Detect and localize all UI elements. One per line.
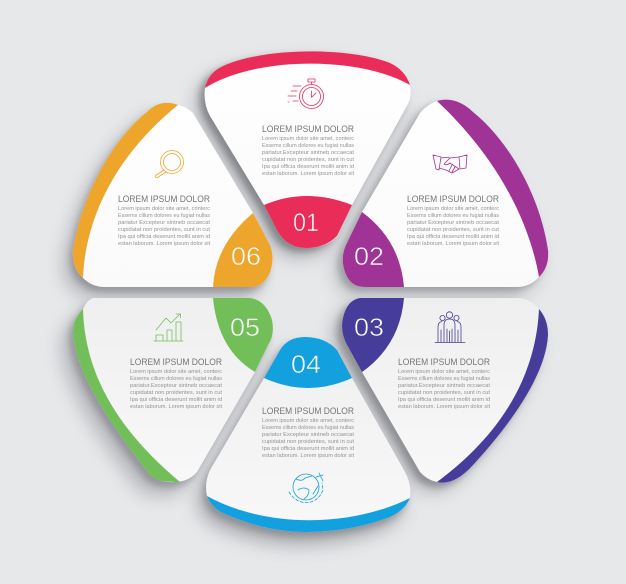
- heading 3: LOREM IPSUM DOLOR: [398, 357, 490, 367]
- panel 3: indigo: [342, 298, 548, 483]
- body text 2: pariatur Excepteur sintneb occaecat: [407, 220, 499, 226]
- body text 4: estan laborum. Lorem ipsum dolor sit: [262, 453, 354, 459]
- number 03: 03: [354, 314, 384, 342]
- panel 2: purple: [343, 100, 548, 287]
- number 02: 02: [354, 243, 384, 271]
- number tab 01: [264, 196, 352, 248]
- body text 2: estan laborum. Lorem ipsum dolor sit: [407, 241, 499, 247]
- soft shadows beneath panels: [61, 55, 543, 545]
- body text 1: estan laborum. Lorem ipsum dolor sit: [262, 171, 354, 177]
- body text 1: Lorem ipsum dolor site amet, conterc: [262, 136, 354, 142]
- body text 1: Ipa qui officia deserunt mollit anim id: [262, 164, 354, 170]
- heading 6: LOREM IPSUM DOLOR: [118, 194, 210, 204]
- green edge band: [73, 309, 180, 482]
- orange edge band: [73, 103, 178, 278]
- body text 6: estan laborum. Lorem ipsum dolor sit: [118, 241, 210, 247]
- heading 5: LOREM IPSUM DOLOR: [130, 357, 222, 367]
- body text 1: cupidatat non proidentes, sunt in cut: [262, 157, 354, 163]
- body text 4: [262, 418, 354, 459]
- body text 4: cupidatat non proidentes, sunt in cut: [262, 439, 354, 445]
- body text 4: Lorem ipsum dolor site amet, conterc: [262, 418, 354, 424]
- red edge band: [205, 51, 410, 88]
- number tab 06: [213, 213, 272, 287]
- body text 1: pariatur.Excepteur sintneb occaecat: [262, 150, 354, 156]
- body text 6: Lorem ipsum dolor site amet, conterc: [118, 206, 210, 212]
- indigo edge band: [437, 309, 548, 483]
- body text 4: Essems cillum dolores eu fugiat nullas: [262, 425, 354, 431]
- body text 6: pariatur Excepteur sintneb occaecat: [118, 220, 210, 226]
- body text 4: Ipa qui officia deserunt mollit anim id: [262, 446, 354, 452]
- body text 3: [398, 369, 490, 410]
- panel 5: green: [73, 298, 273, 482]
- body text 1: Essems cillum dolores eu fugiat nullas: [262, 143, 354, 149]
- number 01: 01: [293, 209, 319, 237]
- panel 4: blue: [206, 337, 410, 532]
- icon: growth chart: [154, 314, 183, 341]
- icon: magnifier: [155, 150, 184, 178]
- body text 4: pariatur Excepteur sintneb occaecat: [262, 432, 354, 438]
- icon: team: [435, 312, 465, 342]
- body text 5: [130, 369, 222, 410]
- body text 5: Lorem ipsum dolor site amet, conterc: [130, 369, 222, 375]
- number tab 02: [343, 212, 404, 287]
- body text 3: pariatur.Excepteur sintneb occaecat: [398, 383, 490, 389]
- number 06: 06: [231, 243, 261, 271]
- body text 2: Essems cillum dolores eu fugiat nullas: [407, 213, 499, 219]
- panel 1: red: [205, 51, 411, 248]
- body text 5: pariatur.Excepteur sintneb occaecat: [130, 383, 222, 389]
- body text 6: cupidatat non proidentes, sunt in cut: [118, 227, 210, 233]
- purple edge band: [437, 100, 548, 277]
- body text 5: cupidatat non proidentes, sunt in cut: [130, 390, 222, 396]
- number 04: 04: [291, 351, 321, 379]
- body text 2: [407, 206, 499, 247]
- body text 3: cupidatat non proidentes, sunt in cut: [398, 390, 490, 396]
- number tab 05: [213, 298, 273, 372]
- number 05: 05: [230, 314, 260, 342]
- body text 1: [262, 136, 354, 177]
- body text 5: Ipa qui officia deserunt mollit anim id: [130, 397, 222, 403]
- heading 4: LOREM IPSUM DOLOR: [262, 406, 354, 416]
- heading 1: LOREM IPSUM DOLOR: [262, 124, 354, 134]
- body text 6: Essems cillum dolores eu fugiat nullas: [118, 213, 210, 219]
- body text 3: Lorem ipsum dolor site amet, conterc: [398, 369, 490, 375]
- body text 3: Ipa qui officia deserunt mollit anim id: [398, 397, 490, 403]
- panel 6: orange: [73, 103, 273, 287]
- number tab 03: [342, 298, 404, 372]
- body text 5: Essems cillum dolores eu fugiat nullas: [130, 376, 222, 382]
- icon: stopwatch: [288, 79, 324, 108]
- body text 2: Lorem ipsum dolor site amet, conterc: [407, 206, 499, 212]
- body text 3: estan laborum. Lorem ipsum dolor sit: [398, 404, 490, 410]
- body text 2: cupidatat non proidentes, sunt in cut: [407, 227, 499, 233]
- body text 6: [118, 206, 210, 247]
- icon: globe: [289, 473, 323, 503]
- icon: handshake: [433, 155, 467, 173]
- body text 3: Essems cillum dolores eu fugiat nullas: [398, 376, 490, 382]
- body text 5: estan laborum. Lorem ipsum dolor sit: [130, 404, 222, 410]
- number tab 04: [264, 337, 352, 388]
- body text 2: Ipa qui officia deserunt mollit anim id: [407, 234, 499, 240]
- heading 2: LOREM IPSUM DOLOR: [407, 194, 499, 204]
- blue edge band: [207, 496, 410, 532]
- body text 6: Ipa qui officia deserunt mollit anim id: [118, 234, 210, 240]
